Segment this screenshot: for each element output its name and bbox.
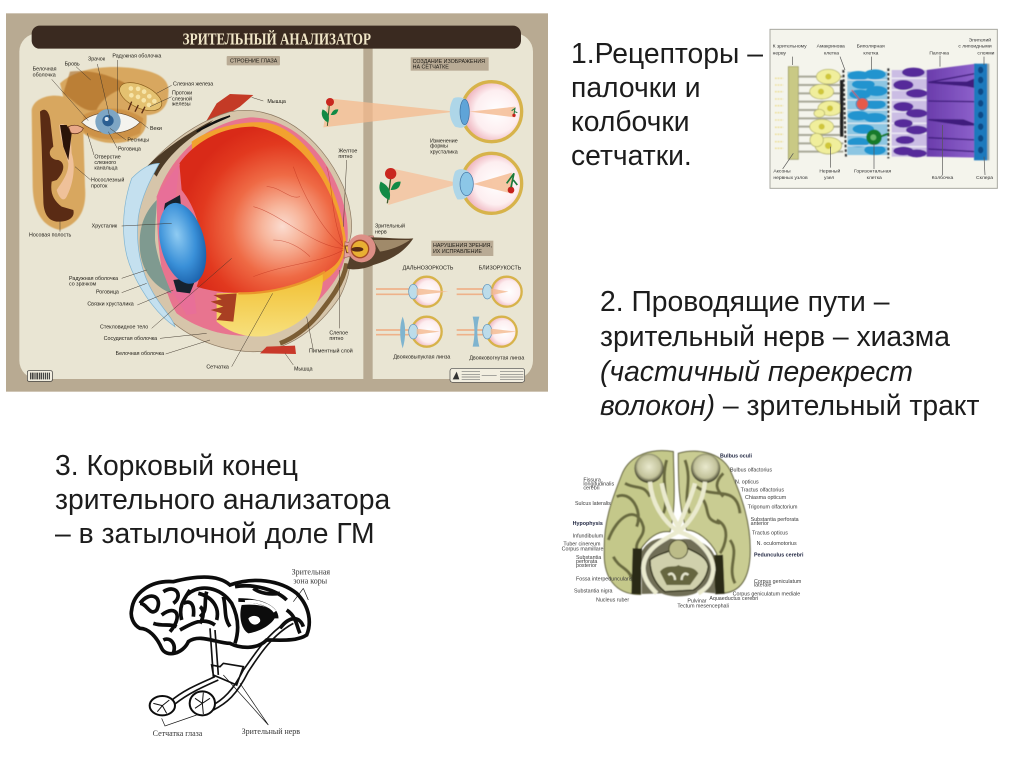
- gyri shading: [608, 460, 740, 583]
- eye structure labels and leader lines: Носослезный: [91, 177, 124, 184]
- retina labels: нервных узлов: [773, 175, 808, 181]
- label: lens shape change: хрусталика: [430, 149, 458, 155]
- eye structure labels and leader lines: слезного: [94, 160, 116, 166]
- label: optic nerve: нерв: [375, 229, 387, 235]
- Latin labels: Corpus geniculatum mediale: [733, 591, 800, 597]
- eye structure labels and leader lines: Веки: [150, 126, 162, 132]
- retina labels: слоями: [977, 50, 995, 56]
- text block 2: pathways: зрительный нерв – хиазма: [600, 320, 950, 352]
- retina labels: Нервный: [819, 167, 840, 174]
- left hemisphere: [604, 451, 674, 594]
- icon: lower retina eye: [453, 153, 522, 213]
- Latin labels: cerebri: [583, 485, 600, 491]
- leader lines: [783, 56, 985, 175]
- label: optic nerve: Зрительный: [375, 223, 405, 230]
- eye structure labels and leader lines: пятно: [329, 336, 343, 342]
- upper section heading: СОЗДАНИЕ ИЗОБРАЖЕНИЯ: [413, 59, 485, 65]
- Latin labels: Trigonum olfactorium: [748, 504, 798, 510]
- beaded synapse lines: [840, 68, 888, 158]
- text block 2: pathways: – зрительный тракт: [715, 389, 980, 421]
- eye structure labels and leader lines: Пигментный слой: [309, 347, 353, 354]
- retina labels: с липоидными: [958, 44, 992, 50]
- text block 1: receptors: сетчатки.: [571, 139, 692, 171]
- brain drawing: [604, 451, 750, 596]
- group: image formation on the retina: [323, 57, 525, 382]
- label: lens shape change: Изменение: [430, 138, 458, 144]
- eye structure labels and leader lines: железы: [172, 102, 191, 108]
- light rays to upper eye: [323, 98, 455, 127]
- Latin labels: N. opticus: [735, 479, 759, 485]
- Latin labels: Sulcus lateralis: [575, 501, 611, 507]
- text block 2: pathways: (частичный перекрест: [600, 355, 913, 387]
- illustration: brain sketch with visual pathway: [131, 567, 330, 738]
- panel: nearsightedness: Двояковогнутая линза: [469, 355, 524, 361]
- eye structure labels and leader lines: со зрачком: [69, 282, 97, 288]
- text block 3: cortical end: зрительного анализатора: [55, 483, 391, 515]
- label: lens shape change: [430, 138, 458, 155]
- eye structure labels and leader lines: Белочная: [33, 67, 57, 73]
- poster title bar: [32, 26, 521, 49]
- Latin labels: Substantia: [576, 555, 601, 561]
- Latin labels: longitudinalis: [583, 481, 614, 487]
- olfactory bulbs: [634, 454, 720, 483]
- retina labels: нерву: [773, 50, 787, 56]
- eye structure labels and leader lines: Желтое: [338, 149, 357, 155]
- blue epithelium and sclera: [974, 64, 989, 160]
- retina labels: узел: [824, 175, 834, 181]
- small flower icon: [322, 98, 338, 126]
- eye structure labels and leader lines: Радужная оболочка: [69, 276, 118, 282]
- retina labels: Колбочка: [932, 175, 954, 181]
- label: lens shape change: формы: [430, 144, 448, 150]
- eye structure labels and leader lines: Ресницы: [127, 137, 149, 143]
- upper section heading: НА СЕТЧАТКЕ: [413, 65, 449, 71]
- Latin labels: Fossa interpeduncularis: [576, 576, 633, 582]
- heading: vision disorders: [431, 241, 493, 256]
- labels: [153, 567, 330, 738]
- retina labels: Аксоны: [773, 168, 791, 174]
- retina labels: Склера: [976, 175, 993, 181]
- illustration: brain base with optic tract: [562, 451, 804, 610]
- retina labels: Эпителий: [969, 37, 991, 44]
- Latin labels: [562, 454, 804, 610]
- text block 2: pathways: 2. Проводящие пути –: [600, 285, 889, 317]
- illustration: main eyeball cross-section: [124, 94, 373, 354]
- eye structure labels and leader lines: Носовая полость: [29, 233, 72, 239]
- retina labels: Палочка: [929, 50, 949, 56]
- eye structure labels and leader lines: Роговица: [118, 147, 141, 153]
- dark fissures beside midbrain: [636, 548, 720, 594]
- diagram: retina layers: [770, 29, 997, 188]
- eye structure labels and leader lines: Зрачок: [88, 56, 106, 62]
- eye structure labels and leader lines: Радужная оболочка: [112, 54, 161, 60]
- Latin labels: Pedunculus cerebri: [754, 553, 804, 559]
- gyri: [140, 586, 303, 653]
- eye structure labels and leader lines: Сетчатка: [206, 364, 229, 370]
- labels: Сетчатка глаза: [153, 729, 203, 738]
- Latin labels: Corpus geniculatum: [754, 579, 802, 585]
- Latin labels: posterior: [576, 563, 597, 569]
- retina cell drawing: [775, 64, 989, 160]
- panel: farsightedness: [376, 266, 454, 361]
- text block 3: cortical end: 3. Корковый конец: [55, 449, 298, 481]
- labels: Зрительная: [292, 567, 330, 576]
- leaders: [162, 588, 308, 726]
- Latin labels: Nucleus ruber: [596, 597, 629, 603]
- panel: farsightedness: Двояковыпуклая линза: [393, 355, 450, 361]
- eye structure labels and leader lines: Роговица: [96, 289, 119, 295]
- upper section heading: [411, 57, 489, 71]
- eye structure labels and leader lines: Белочная оболочка: [116, 351, 164, 357]
- eye structure labels and leader lines: [29, 54, 357, 373]
- panel: farsightedness: ДАЛЬНОЗОРКОСТЬ: [403, 266, 454, 272]
- retina labels: клетка: [824, 50, 839, 56]
- Latin labels: Tuber cinereum: [563, 541, 601, 547]
- heading: eye structure: [227, 56, 280, 65]
- eye structure labels and leader lines: слезной: [172, 95, 192, 102]
- eye structure labels and leader lines: канальца: [94, 165, 118, 171]
- purple rods and cones: [890, 64, 977, 158]
- Latin labels: Pulvinar: [687, 598, 707, 604]
- illustration: flower and rays to lower eye: [379, 168, 460, 205]
- retina labels: К зрительному: [773, 44, 807, 50]
- heading: vision disorders: ИХ ИСПРАВЛЕНИЕ: [433, 249, 482, 255]
- illustration: optic nerve tail: [347, 234, 413, 269]
- Latin labels: N. oculomotorius: [757, 541, 797, 547]
- Latin labels: Hypophysis: [573, 521, 603, 527]
- eye structure labels and leader lines: Протоки: [172, 91, 192, 97]
- eye structure labels and leader lines: Хрусталик: [92, 223, 118, 229]
- retinas: [150, 691, 215, 715]
- dark ventricle: [240, 605, 277, 633]
- Latin labels: anterior: [751, 521, 769, 527]
- barcode: [27, 371, 52, 381]
- text block 1: receptors: палочки и: [571, 71, 701, 103]
- text block 2: pathways: волокон): [600, 389, 715, 421]
- labels: зона коры: [293, 576, 328, 585]
- heading: vision disorders: НАРУШЕНИЯ ЗРЕНИЯ,: [433, 243, 492, 249]
- optic pathway: [170, 620, 293, 710]
- retina labels: Биполярная: [857, 44, 885, 50]
- Latin labels: Tractus olfactorius: [741, 488, 784, 494]
- Latin labels: Bulbus olfactorius: [730, 468, 772, 474]
- eye structure labels and leader lines: Сосудистая оболочка: [104, 336, 157, 342]
- Latin labels: Corpus mamillare: [562, 547, 603, 553]
- illustration: face section with lacrimal apparatus: [32, 67, 169, 230]
- brain outline: [131, 577, 309, 654]
- eye structure labels and leader lines: Связки хрусталика: [87, 302, 134, 308]
- retina labels: клетка: [863, 50, 879, 56]
- labels: Зрительный нерв: [242, 727, 300, 736]
- text block 1: receptors: 1.Рецепторы –: [571, 37, 763, 69]
- text block 1: receptors: колбочки: [571, 105, 690, 137]
- eye structure labels and leader lines: проток: [91, 183, 108, 189]
- eye structure labels and leader lines: Отверстие: [94, 155, 121, 161]
- retina labels: клетка: [867, 175, 882, 181]
- heading: eye structure: СТРОЕНИЕ ГЛАЗА: [230, 59, 278, 65]
- eye structure labels and leader lines: Слезная железа: [173, 81, 213, 87]
- Latin labels: Substantia perforata: [751, 517, 799, 523]
- Latin labels: Tractus opticus: [752, 531, 788, 537]
- retina labels: [773, 37, 995, 181]
- Latin labels: Fissura: [583, 478, 601, 484]
- panel: nearsightedness: [457, 266, 524, 361]
- icon: upper retina eye: [450, 82, 522, 142]
- publisher imprint box: [450, 368, 525, 382]
- poster: visual analyzer: [6, 13, 548, 392]
- text block 3: cortical end: – в затылочной доле ГМ: [55, 517, 375, 549]
- right hemisphere: [678, 451, 750, 593]
- Latin labels: Bulbus oculi: [720, 454, 752, 460]
- Latin labels: laterale: [754, 583, 772, 589]
- optic tracts and chiasm: [643, 482, 713, 593]
- Latin labels: perforata: [576, 559, 597, 565]
- Latin labels: Aquaeductus cerebri: [709, 596, 758, 602]
- retina labels: Горизонтальная: [854, 168, 891, 174]
- Latin labels: Infundibulum: [573, 533, 604, 539]
- Latin labels: Substantia nigra: [574, 588, 613, 594]
- eye structure labels and leader lines: пятно: [338, 154, 352, 160]
- retina labels: Амакринова: [817, 44, 845, 50]
- blue bipolar cell layer: [847, 69, 889, 155]
- panel: nearsightedness: БЛИЗОРУКОСТЬ: [479, 266, 522, 272]
- eye structure labels and leader lines: Мышца: [267, 99, 286, 105]
- Latin labels: Chiasma opticum: [745, 495, 787, 501]
- label: optic nerve: [375, 223, 405, 235]
- Latin labels: Tectum mesencephali: [677, 604, 729, 610]
- eye structure labels and leader lines: Мышца: [294, 367, 313, 373]
- midbrain: [642, 538, 715, 596]
- yellow axon column and cells: [775, 67, 843, 159]
- poster title bar: ЗРИТЕЛЬНЫЙ АНАЛИЗАТОР: [183, 29, 371, 48]
- eye structure labels and leader lines: оболочка: [33, 72, 56, 78]
- eye structure labels and leader lines: Бровь: [65, 61, 80, 67]
- eye structure labels and leader lines: Слепое: [329, 331, 348, 337]
- eye structure labels and leader lines: Стекловидное тело: [100, 324, 148, 330]
